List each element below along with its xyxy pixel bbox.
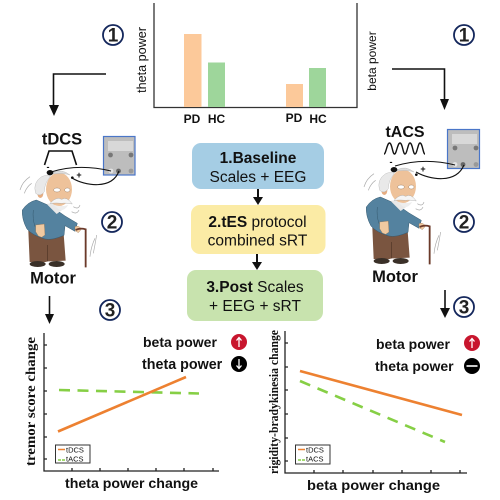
label: Motor: Motor [372, 268, 418, 286]
panel: tACS patient [364, 124, 480, 286]
step marker: 3 right [454, 297, 474, 318]
arrow: left motor down [45, 296, 54, 324]
legend: tDCS [306, 446, 324, 454]
bar labels: PD [184, 112, 201, 126]
bar: beta PD [286, 84, 303, 107]
flow box: post: + EEG + sRT [209, 298, 301, 315]
line: tDCS [300, 371, 462, 415]
arrow: right motor down [440, 290, 450, 318]
icon: elderly patient [20, 170, 97, 267]
icon: electrode wires [395, 161, 464, 179]
bar labels: HC [309, 112, 327, 126]
polarity marks: - [390, 157, 392, 167]
text: beta power: beta power [376, 336, 450, 352]
polarity marks: - [46, 162, 50, 172]
step marker: 2 left: 2 [107, 212, 117, 234]
flow box: post: 3.Post Scales [206, 279, 304, 296]
line: tACS [59, 390, 199, 394]
step marker: 3 left: 3 [105, 300, 115, 322]
axis label: beta power: beta power [365, 31, 379, 91]
step marker: 1 left [103, 25, 123, 46]
flow box: baseline: Scales + EEG [210, 169, 306, 186]
bar labels: HC [208, 112, 225, 126]
step marker: 3 right: 3 [459, 298, 469, 318]
axis label: theta power: theta power [135, 27, 149, 93]
icon: stimulator device [448, 130, 480, 168]
step marker: 1 right: 1 [459, 26, 470, 46]
bar: theta HC [208, 62, 225, 107]
text: beta power: beta power [143, 334, 217, 350]
bar labels [184, 111, 327, 126]
chart axes [285, 331, 467, 473]
axis label: tremor score change: tremor score change [24, 337, 39, 466]
step marker: 2 left [102, 212, 122, 234]
panel: tACS patient: + [420, 164, 426, 174]
icon: up [231, 334, 247, 350]
panel: tDCS patient: + [76, 170, 82, 180]
icon: sine wave [384, 143, 425, 154]
icon: electrode wires [51, 167, 119, 185]
icon: neutral [464, 358, 480, 374]
legend [56, 445, 90, 464]
line: tDCS [58, 377, 186, 432]
icon: down [231, 356, 247, 372]
bar: beta HC [309, 68, 326, 107]
icon: up [464, 335, 480, 351]
label: tACS: tACS [385, 124, 425, 141]
panel: baseline bar chart [135, 3, 379, 126]
axis label: theta power change: theta power change [65, 475, 198, 491]
text: theta power: theta power [142, 357, 223, 373]
legend: tACS [306, 454, 324, 464]
legend: tACS [66, 454, 84, 464]
icon: stimulator device [104, 136, 135, 175]
step marker: 1 left: 1 [108, 26, 119, 46]
flow box: baseline: 1.Baseline [220, 150, 297, 167]
arrow: left elbow [49, 74, 106, 116]
line: tACS [300, 381, 445, 442]
flow box: protocol: 2.tES protocol [208, 214, 307, 231]
flow box: baseline [192, 143, 324, 189]
legend [296, 445, 330, 464]
panel: tremor chart [24, 333, 247, 491]
axis label: rigidity-bradykinesia change: rigidity-bradykinesia change [267, 330, 281, 474]
icon: elderly patient [364, 167, 441, 264]
arrow: protocol to post [252, 254, 262, 270]
step marker: 2 right [454, 212, 474, 234]
bar labels: PD [286, 111, 303, 125]
panel: tDCS patient [20, 130, 135, 288]
legend: tDCS [66, 446, 84, 454]
label: Motor: Motor [30, 270, 76, 288]
flow box: protocol: combined sRT [208, 232, 308, 250]
flow box: protocol [191, 205, 326, 254]
step marker: 1 right [454, 25, 474, 46]
axis label: beta power change: beta power change [307, 477, 440, 493]
icon: tDCS bracket [44, 151, 76, 165]
chart axes [44, 333, 219, 471]
step marker: 2 right: 2 [459, 212, 469, 234]
arrow: right elbow [392, 69, 449, 110]
step marker: 3 left [100, 300, 120, 322]
panel: rigidity chart [267, 330, 480, 493]
flow box: post [187, 270, 323, 321]
arrow: baseline to protocol [253, 189, 263, 205]
text: theta power: theta power [375, 358, 454, 374]
label: tDCS: tDCS [42, 130, 82, 148]
bar: theta PD [184, 34, 202, 107]
